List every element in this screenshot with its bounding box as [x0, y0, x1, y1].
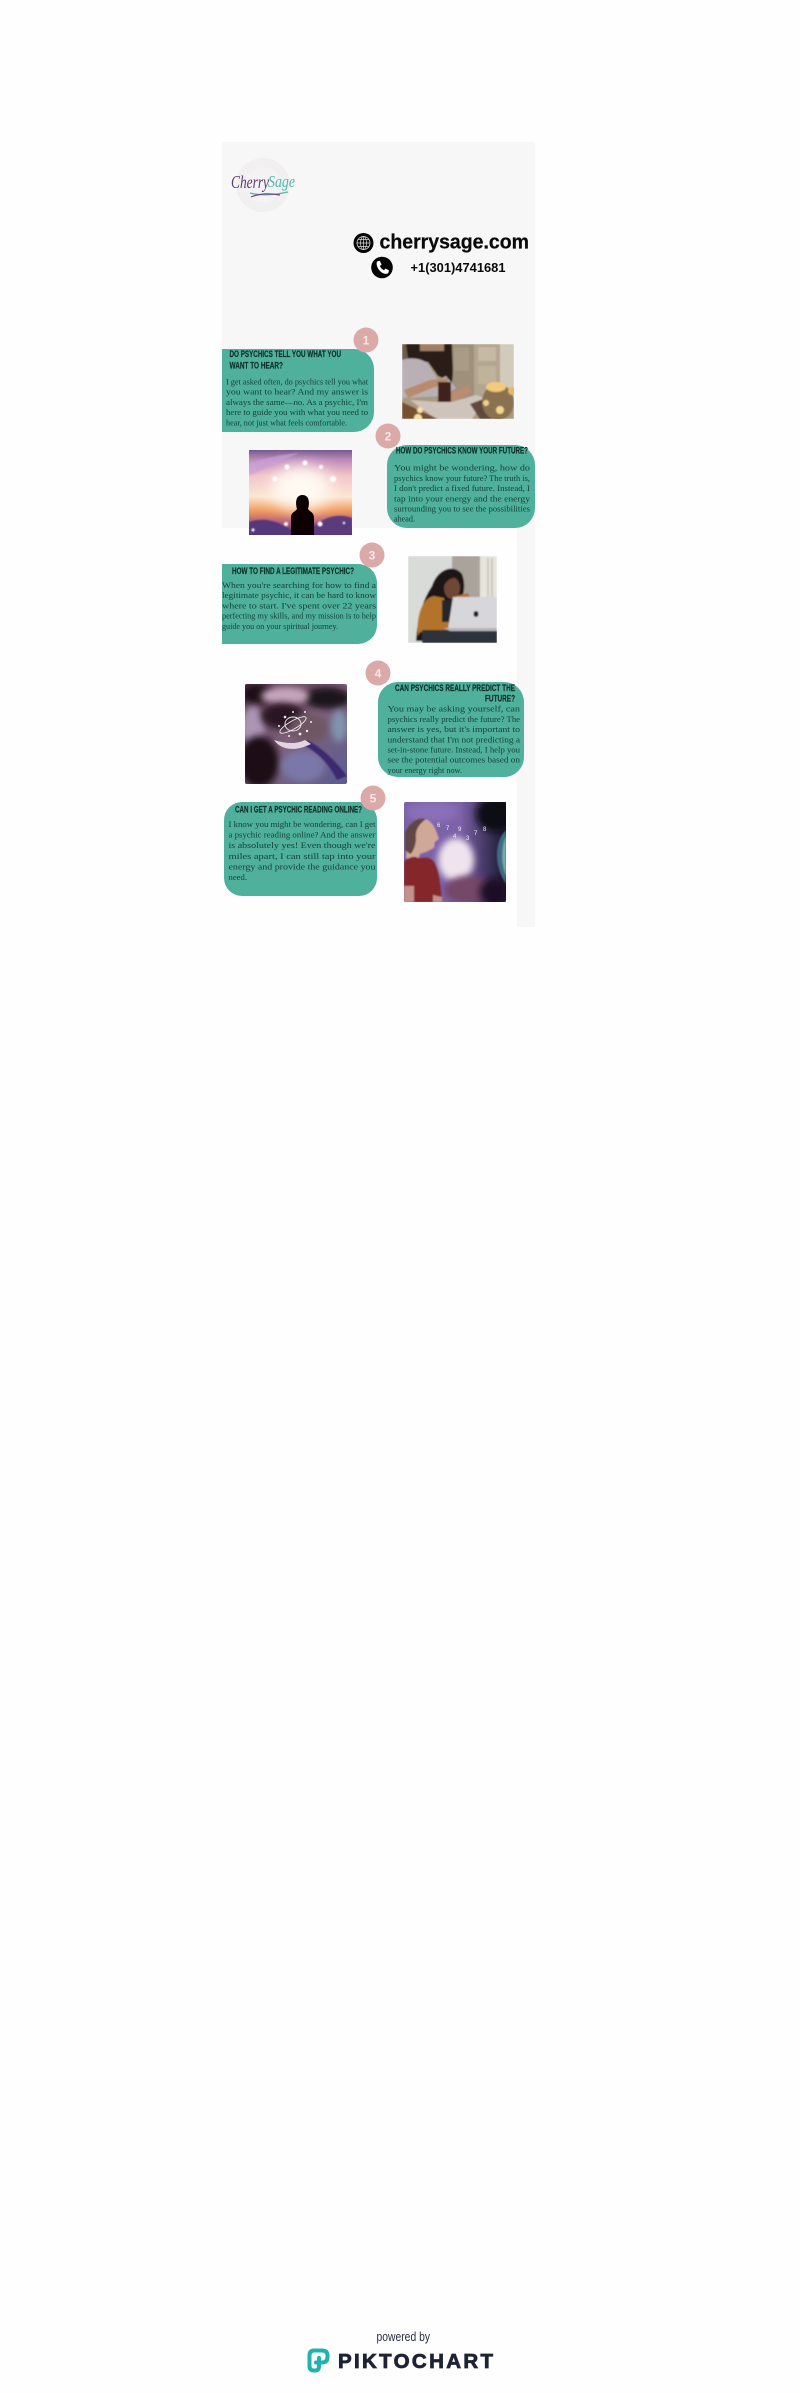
card 1 body text: hear, not just what feels comfortable. — [226, 418, 347, 427]
hand and planet line art — [274, 711, 312, 749]
card 2 body text — [394, 464, 531, 524]
floating numbers: 9 — [458, 827, 462, 833]
card 1 body text — [226, 378, 369, 427]
powered by label: powered by — [376, 2330, 431, 2344]
badge 4: 4 — [375, 666, 382, 680]
panel: question 4 card — [378, 682, 524, 777]
card 5 heading: CAN I GET A PSYCHIC READING ONLINE? — [235, 805, 362, 815]
floating numbers: 7 — [446, 826, 450, 832]
card 2 background — [387, 445, 535, 528]
card 4 body text: your energy right now. — [388, 766, 462, 775]
card 1 body text: here to guide you with what you need to — [226, 408, 368, 417]
card 1 body text: you want to hear? And my answer is — [226, 388, 368, 397]
card 4 heading — [395, 683, 515, 704]
card 3 body text: where to start. I've spent over 22 years — [222, 601, 376, 610]
logo: Cherry Sage: Sage — [268, 172, 295, 191]
card 3 body text: When you're searching for how to find a — [222, 581, 376, 590]
icon: globe — [354, 233, 374, 253]
photo: nebula with hand holding planet — [245, 684, 347, 784]
card 5 background — [224, 802, 377, 896]
card 4 body text: psychics really predict the future? The — [388, 715, 520, 724]
website address: cherrysage.com — [380, 231, 529, 253]
panel: header background — [222, 142, 535, 528]
icon: phone — [371, 257, 393, 278]
badge 1: 1 — [363, 333, 370, 347]
card 5 body text — [228, 820, 376, 882]
card 4 heading: FUTURE? — [485, 694, 515, 704]
card 3 body text: legitimate psychic, it can be hard to know — [222, 591, 376, 600]
card 4 body text: You may be asking yourself, can — [388, 705, 520, 714]
floating numbers: 8 — [483, 827, 487, 833]
card 5 body text: need. — [228, 873, 247, 882]
card 5 body text: is absolutely yes! Even though we're — [228, 841, 376, 850]
card 3 background — [222, 564, 377, 644]
card 5 body text: miles apart, I can still tap into your — [228, 852, 376, 861]
panel: question 3 card — [222, 564, 377, 644]
card 3 body text — [222, 581, 376, 631]
card 3 heading: HOW TO FIND A LEGITIMATE PSYCHIC? — [232, 566, 354, 576]
card 4 body text — [388, 705, 520, 775]
badge 2: 2 — [385, 429, 392, 443]
photo: girl looking at cosmic numbers — [404, 802, 506, 902]
card 2 body text: tap into your energy and the energy — [394, 494, 531, 503]
panel: question 1 card — [222, 349, 374, 432]
Piktochart wordmark: PIKTOCHART — [338, 2350, 493, 2373]
badge 4 — [366, 660, 390, 686]
card 2 heading: HOW DO PSYCHICS KNOW YOUR FUTURE? — [396, 446, 528, 456]
card 2 body text: You might be wondering, how do — [394, 464, 530, 473]
badge 5: 5 — [370, 791, 377, 805]
phone number: +1(301)4741681 — [410, 260, 506, 275]
card 2 body text: ahead. — [394, 515, 415, 524]
floating numbers: 7 — [474, 831, 478, 837]
card 1 heading — [230, 349, 341, 370]
badge 5 — [360, 786, 386, 810]
card 1 body text: always the same—no. As a psychic, I'm — [226, 398, 369, 407]
card 1 body text: I get asked often, do psychics tell you what — [226, 378, 369, 386]
silhouette — [291, 495, 314, 535]
logo: Cherry Sage — [231, 158, 295, 212]
logo: Cherry Sage: Cherry — [231, 172, 269, 192]
girl — [404, 819, 442, 902]
card 4 heading: CAN PSYCHICS REALLY PREDICT THE — [395, 683, 515, 693]
photo: woman at laptop — [408, 556, 497, 643]
card 3 body text: guide you on your spiritual journey. — [222, 622, 338, 631]
panel: question 2 card — [387, 445, 535, 528]
icon: Piktochart logo mark — [310, 2350, 328, 2370]
card 2 body text: surrounding you to see the possibilities — [394, 504, 530, 514]
panel: right side strip — [517, 528, 535, 927]
card 2 body text: I don't predict a fixed future. Instead, I — [394, 484, 530, 493]
card 5 body text: a psychic reading online? And the answer — [228, 831, 376, 840]
badge 1 — [354, 328, 378, 352]
card 4 background — [378, 682, 524, 777]
card 4 body text: understand that I'm not predicting a — [388, 735, 520, 744]
badge 3 — [360, 542, 384, 568]
card 3 body text: perfecting my skills, and my mission is to help — [222, 612, 376, 621]
card 5 body text: I know you might be wondering, can I get — [228, 820, 376, 829]
badge 2 — [376, 424, 400, 448]
floating numbers: 3 — [466, 836, 470, 842]
card 4 body text: see the potential outcomes based on — [388, 756, 520, 765]
card 1 heading: DO PSYCHICS TELL YOU WHAT YOU — [230, 349, 341, 359]
card 1 heading: WANT TO HEAR? — [230, 360, 283, 370]
photo: silhouette against glowing sky — [249, 450, 352, 535]
card 5 body text: energy and provide the guidance you — [228, 862, 376, 871]
panel: question 5 card — [224, 802, 377, 896]
card 1 background — [222, 349, 374, 432]
card 4 body text: set-in-stone future. Instead, I help you — [388, 746, 520, 754]
floating numbers: 4 — [453, 834, 457, 840]
photo: tarot reading at table — [402, 344, 514, 419]
card 2 body text: psychics know your future? The truth is, — [394, 474, 530, 483]
floating numbers: 6 — [437, 823, 441, 829]
card 4 body text: answer is yes, but it's important to — [388, 725, 520, 734]
badge 3: 3 — [369, 548, 376, 562]
floating numbers — [437, 823, 487, 842]
